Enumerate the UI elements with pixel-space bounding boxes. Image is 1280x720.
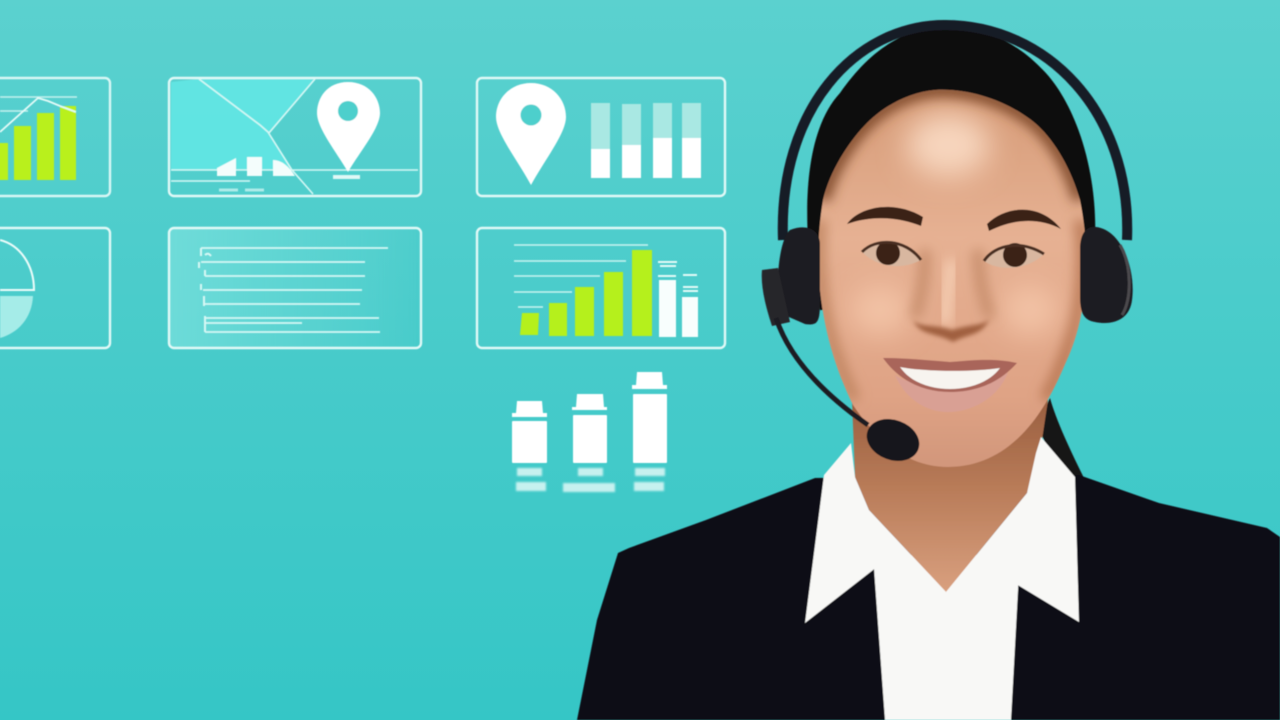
left eyebrow bbox=[847, 207, 923, 226]
map bars bbox=[217, 157, 295, 176]
list bullets bbox=[199, 248, 211, 332]
panel: cropped bar and line chart bbox=[0, 78, 110, 196]
forehead highlight bbox=[906, 113, 990, 177]
nose side shade bbox=[915, 250, 990, 318]
bottle 3 bbox=[632, 372, 667, 463]
left ear cup bbox=[762, 227, 820, 326]
location pin bbox=[496, 83, 566, 185]
ponytail bbox=[1038, 398, 1086, 482]
microphone bbox=[861, 412, 925, 468]
right ear cup bbox=[1080, 227, 1133, 323]
map roads bbox=[171, 79, 418, 194]
lower lip bbox=[895, 372, 1008, 412]
panel: location pin with stacked bars bbox=[477, 78, 725, 196]
hairline shade bbox=[823, 90, 1080, 200]
person: call centre agent bbox=[577, 25, 1280, 720]
green bars bbox=[520, 250, 652, 336]
map small labels bbox=[219, 188, 264, 192]
jacket bbox=[577, 475, 1280, 720]
illegible bottle captions bbox=[516, 468, 665, 492]
white bars bbox=[659, 280, 698, 337]
left collar bbox=[805, 443, 946, 623]
face side shade right bbox=[1045, 220, 1083, 400]
nose shadow bbox=[913, 318, 990, 342]
bottle 2 bbox=[572, 394, 607, 463]
teeth bbox=[900, 367, 1000, 389]
face bbox=[818, 88, 1086, 468]
microphone boom bbox=[776, 318, 868, 425]
panel: cropped pie chart bbox=[0, 228, 110, 348]
panel: text list lines bbox=[169, 228, 421, 348]
green bars bbox=[0, 106, 76, 180]
pie lower slice bbox=[0, 296, 33, 338]
panel: map with location pin bbox=[169, 78, 421, 196]
right collar bbox=[946, 437, 1079, 622]
pie outline bbox=[0, 240, 34, 290]
nose highlight bbox=[945, 260, 952, 325]
shirt bbox=[873, 555, 1020, 720]
right eye bbox=[984, 243, 1044, 268]
location pin bbox=[317, 82, 380, 172]
cheeks bbox=[850, 285, 1058, 335]
trend line bbox=[0, 98, 76, 132]
face side shade left bbox=[819, 220, 855, 400]
neck bbox=[852, 400, 1048, 592]
headband bbox=[783, 25, 1127, 240]
hair bbox=[807, 27, 1095, 310]
panel: growth bar chart bbox=[477, 228, 725, 348]
bottle 1 bbox=[512, 401, 547, 463]
stacked bars bbox=[591, 103, 701, 178]
upper lip and mouth bbox=[883, 358, 1017, 392]
left eye bbox=[862, 241, 921, 266]
right eyebrow bbox=[987, 210, 1061, 231]
bottle icons bbox=[512, 372, 667, 463]
